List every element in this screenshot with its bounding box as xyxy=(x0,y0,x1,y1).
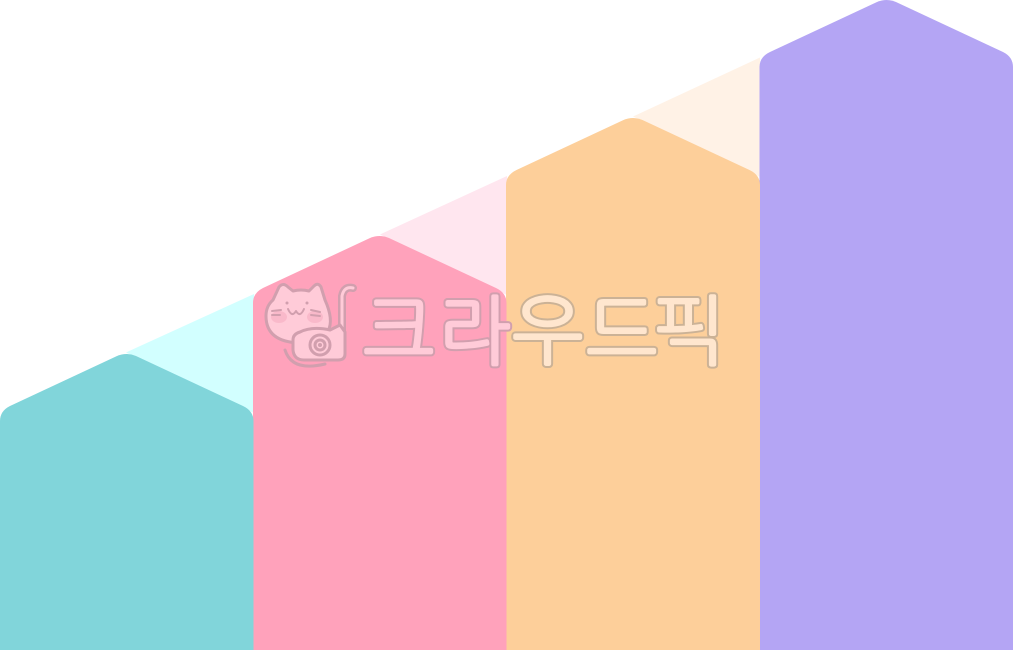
column 4: purple arrow xyxy=(760,0,1013,650)
cat cheek left xyxy=(271,311,287,323)
column 2: pink arrow xyxy=(253,236,506,650)
cat head xyxy=(266,284,330,343)
column 3: orange arrow xyxy=(506,118,760,650)
outline: 크라 xyxy=(363,290,510,375)
outline: 우드픽 xyxy=(512,290,725,375)
camera xyxy=(293,325,345,360)
camera lens pupil xyxy=(318,343,322,347)
inner: 크라 xyxy=(363,290,510,375)
inner: 우드픽 xyxy=(512,290,725,375)
shadow triangle: orange xyxy=(633,58,760,177)
watermark icon: cat with camera xyxy=(266,284,353,366)
shadow triangle: pink xyxy=(380,176,507,295)
shadow triangle: teal xyxy=(126,294,254,413)
cat tail xyxy=(342,288,353,330)
camera lens xyxy=(310,335,330,355)
watermark xyxy=(266,284,725,375)
cat eye left xyxy=(286,302,288,304)
cat eye right xyxy=(306,302,308,304)
watermark text: pink side xyxy=(363,290,510,375)
column 1: teal arrow xyxy=(0,354,254,650)
cat face xyxy=(272,309,320,316)
cat body arc xyxy=(285,350,325,366)
watermark text: orange side xyxy=(512,290,725,375)
cat cheek right xyxy=(307,311,323,323)
camera lens inner xyxy=(315,340,325,350)
